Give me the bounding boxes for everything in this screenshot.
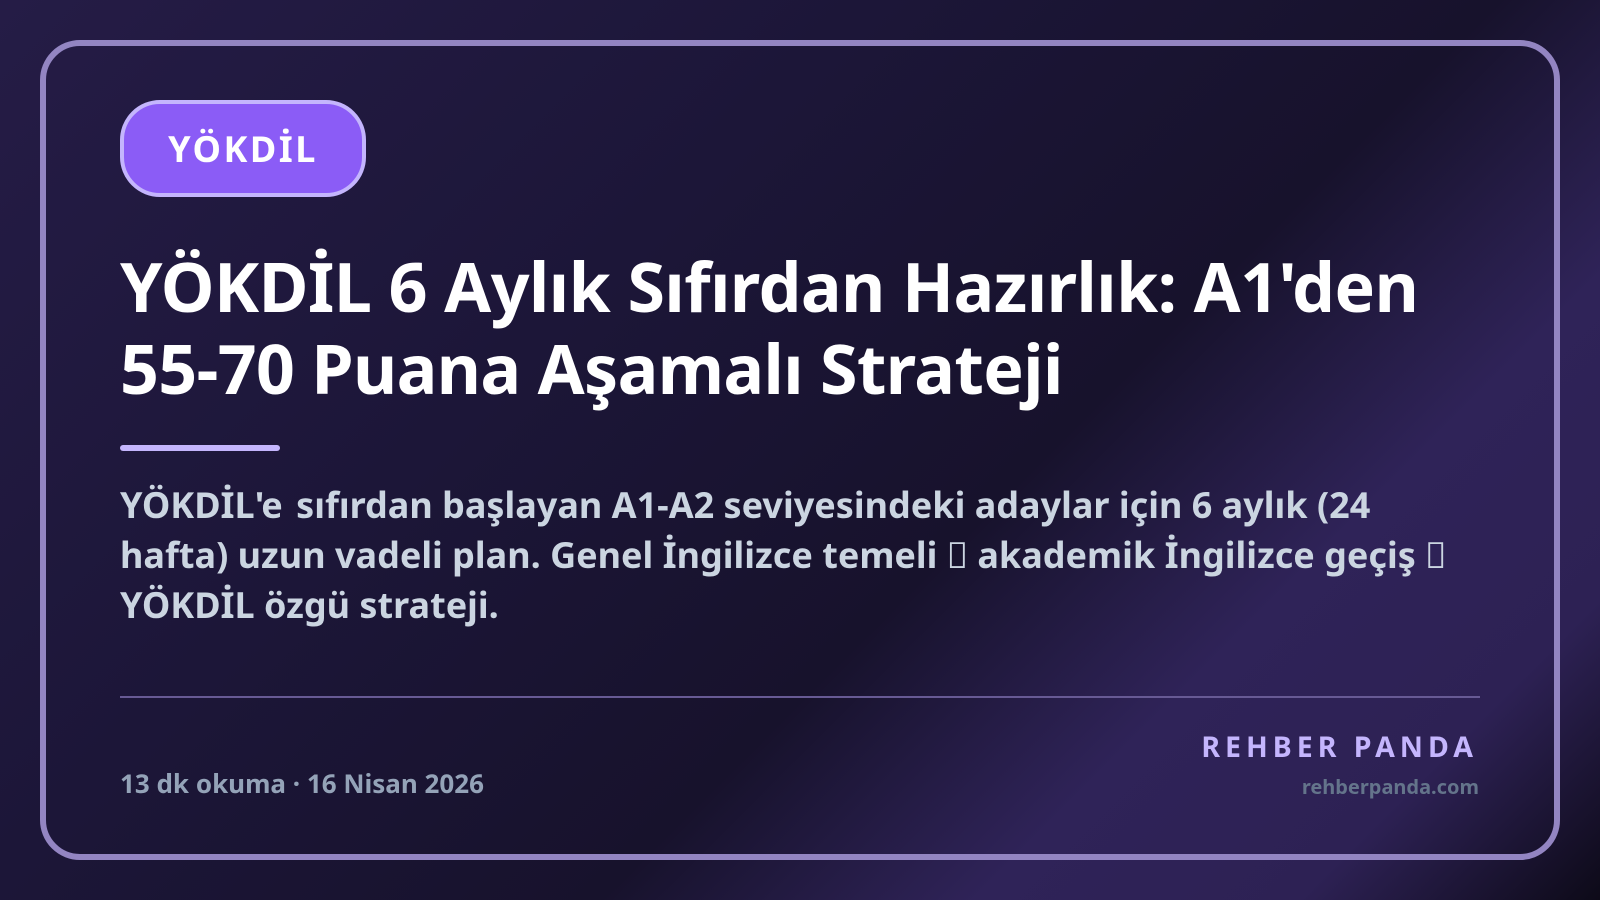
description: YÖKDİL'e sıfırdan başlayan A1-A2 seviyesindeki adaylar için 6 aylık (24 <box>120 480 1370 529</box>
title: YÖKDİL 6 Aylık Sıfırdan Hazırlık: A1'den <box>120 239 1418 332</box>
description <box>120 480 1446 629</box>
footer divider <box>120 696 1480 698</box>
brand url: rehberpanda.com <box>1302 773 1479 800</box>
title <box>120 239 1418 414</box>
badge: YÖKDİL: YÖKDİL <box>168 124 318 173</box>
description: YÖKDİL özgü strateji. <box>120 580 499 629</box>
title: 55-70 Puana Aşamalı Strateji <box>120 321 1063 414</box>
brand name: REHBER PANDA <box>1201 728 1478 766</box>
accent bar <box>120 445 280 451</box>
badge: YÖKDİL <box>120 100 366 197</box>
reading time and date: 13 dk okuma · 16 Nisan 2026 <box>120 765 484 801</box>
description: hafta) uzun vadeli plan. Genel İngilizce temeli  akademik İngilizce geçiş  <box>120 530 1446 579</box>
